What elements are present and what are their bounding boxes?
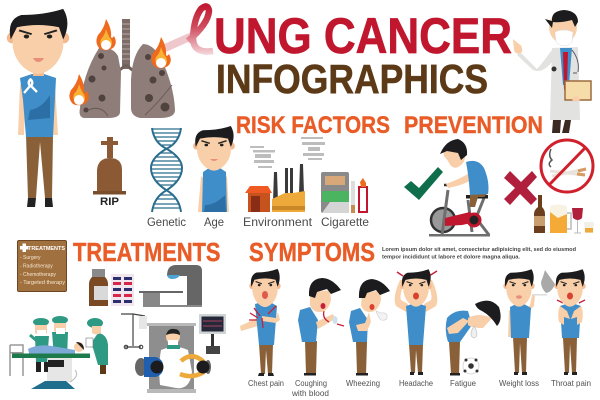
treatments list board bbox=[18, 240, 66, 292]
symptom: fatigue: Fatigue bbox=[450, 378, 476, 388]
bike bbox=[429, 185, 490, 236]
lorem ipsum text block bbox=[382, 247, 576, 260]
treatments list board: - Radiotherapy bbox=[20, 264, 53, 270]
risk factor: RIP tombstone: RIP bbox=[100, 196, 119, 208]
clipboard bbox=[565, 81, 591, 100]
main patient figure bbox=[7, 9, 69, 207]
risk factor: age figure: Age bbox=[204, 215, 224, 229]
awareness ribbon bbox=[24, 79, 37, 93]
football bbox=[463, 358, 479, 374]
flame left bbox=[69, 74, 89, 105]
surgeons bbox=[35, 332, 68, 362]
operating room top view bbox=[121, 314, 226, 393]
heading: Symptoms: SYMPTOMS bbox=[249, 239, 375, 267]
symptom: coughing with blood: Coughing bbox=[295, 378, 327, 388]
prevention: man on exercise bike bbox=[429, 139, 490, 236]
treatments list board: TREATMENTS bbox=[28, 246, 65, 252]
risk factor: environment factory bbox=[243, 137, 325, 229]
lorem ipsum text block: tempor incididunt ut labore et dolore magna aliqua. bbox=[382, 254, 520, 260]
breath puff bbox=[376, 311, 387, 320]
treatments list board: - Chemotherapy bbox=[20, 272, 56, 278]
flame top bbox=[96, 19, 116, 50]
symptom: weight loss, smoking bbox=[499, 269, 555, 388]
radiotherapy machine bbox=[139, 265, 202, 307]
patient on bed bbox=[28, 345, 75, 357]
risk factor: cigarette pack and lighter bbox=[321, 172, 369, 229]
alcohol: bottle and glasses bbox=[534, 195, 594, 233]
flame right bbox=[151, 37, 171, 68]
symptom: chest pain bbox=[240, 269, 284, 388]
heading text: UNG CANCER bbox=[214, 8, 512, 64]
symptom: throat pain bbox=[551, 269, 591, 388]
risk factor: environment factory: Environment bbox=[243, 215, 313, 229]
doctor figure bbox=[513, 10, 591, 133]
lorem ipsum text block: Lorem ipsum dolor sit amet, consectetur adipisicing elit, sed do eiusmod bbox=[382, 247, 576, 253]
heart monitor bbox=[199, 314, 226, 354]
no smoking sign bbox=[541, 140, 593, 192]
lungs with flames bbox=[69, 19, 175, 118]
symptom: headache: Headache bbox=[399, 378, 433, 388]
symptom: coughing with blood: with blood bbox=[291, 388, 329, 398]
risk factor: RIP tombstone bbox=[93, 137, 126, 208]
symptom: weight loss, smoking: Weight loss bbox=[499, 378, 539, 388]
IV pole bbox=[121, 314, 147, 349]
symptom: headache bbox=[395, 269, 437, 388]
symptom: chest pain: Chest pain bbox=[248, 378, 284, 388]
symptom: fatigue bbox=[446, 301, 501, 388]
symptom: wheezing bbox=[346, 279, 390, 388]
vomit drop bbox=[471, 326, 477, 338]
orange surgeon bbox=[180, 356, 211, 376]
heading: Risk Factors: RISK FACTORS bbox=[236, 112, 390, 139]
prevention: red cross bbox=[504, 171, 537, 205]
surgery team at operating table bbox=[10, 316, 108, 389]
risk factor: genetic DNA helix: Genetic bbox=[147, 215, 186, 229]
risk factor: age figure bbox=[193, 126, 235, 229]
prevention: check mark bbox=[404, 167, 443, 200]
heading: Prevention: PREVENTION bbox=[404, 112, 543, 139]
subtitle: Infographics: INFOGRAPHICS bbox=[216, 56, 488, 102]
title: Lung Cancer bbox=[165, 6, 512, 64]
medicine bottle bbox=[89, 269, 108, 306]
risk factor: genetic DNA helix bbox=[147, 128, 186, 229]
treatments list board: - Surgery bbox=[20, 255, 41, 261]
symptom: wheezing: Wheezing bbox=[346, 378, 380, 388]
treatments list board: - Targeted therapy bbox=[20, 280, 66, 286]
symptom: throat pain: Throat pain bbox=[551, 378, 591, 388]
heading: Treatments: TREATMENTS bbox=[73, 239, 220, 267]
blue surgeon bbox=[135, 357, 164, 377]
ribbon letter L bbox=[165, 6, 213, 51]
risk factor: cigarette pack and lighter: Cigarette bbox=[321, 215, 369, 229]
symptom: coughing with blood bbox=[291, 278, 344, 398]
pill pack bbox=[111, 274, 134, 306]
